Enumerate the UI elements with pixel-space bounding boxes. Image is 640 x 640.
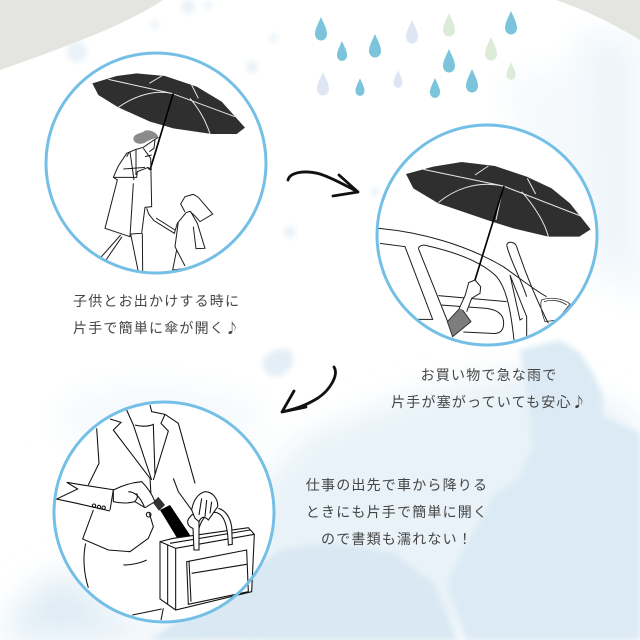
caption: work xyxy=(306,475,488,549)
umbrella xyxy=(406,162,591,280)
child figure xyxy=(147,194,213,270)
folded umbrella xyxy=(160,505,193,546)
jacket and torso xyxy=(110,405,195,495)
caption: shopping: 片手が塞がっていても安心♪ xyxy=(391,392,587,412)
adult figure xyxy=(100,137,158,272)
caption: work: 仕事の出先で車から降りる xyxy=(306,475,488,495)
side mirror xyxy=(541,298,570,322)
umbrella xyxy=(92,73,245,170)
caption: child outing xyxy=(73,291,240,338)
caption: shopping xyxy=(391,365,587,412)
gray sleeve xyxy=(447,307,471,337)
caption: work: ときにも片手で簡単に開く xyxy=(306,502,488,522)
caption: work: ので書類も濡れない！ xyxy=(321,529,473,549)
bag xyxy=(160,508,254,610)
left hand xyxy=(113,482,155,508)
caption: shopping: お買い物で急な雨で xyxy=(421,365,557,385)
arm and hand xyxy=(459,280,481,312)
caption: child outing: 子供とお出かけする時に xyxy=(73,291,240,311)
right hand xyxy=(192,492,218,522)
car xyxy=(378,228,548,340)
raindrops xyxy=(315,11,517,98)
cuff buttons xyxy=(92,504,151,517)
hair of adult xyxy=(133,130,158,144)
caption: child outing: 片手で簡単に傘が開く♪ xyxy=(73,318,240,338)
